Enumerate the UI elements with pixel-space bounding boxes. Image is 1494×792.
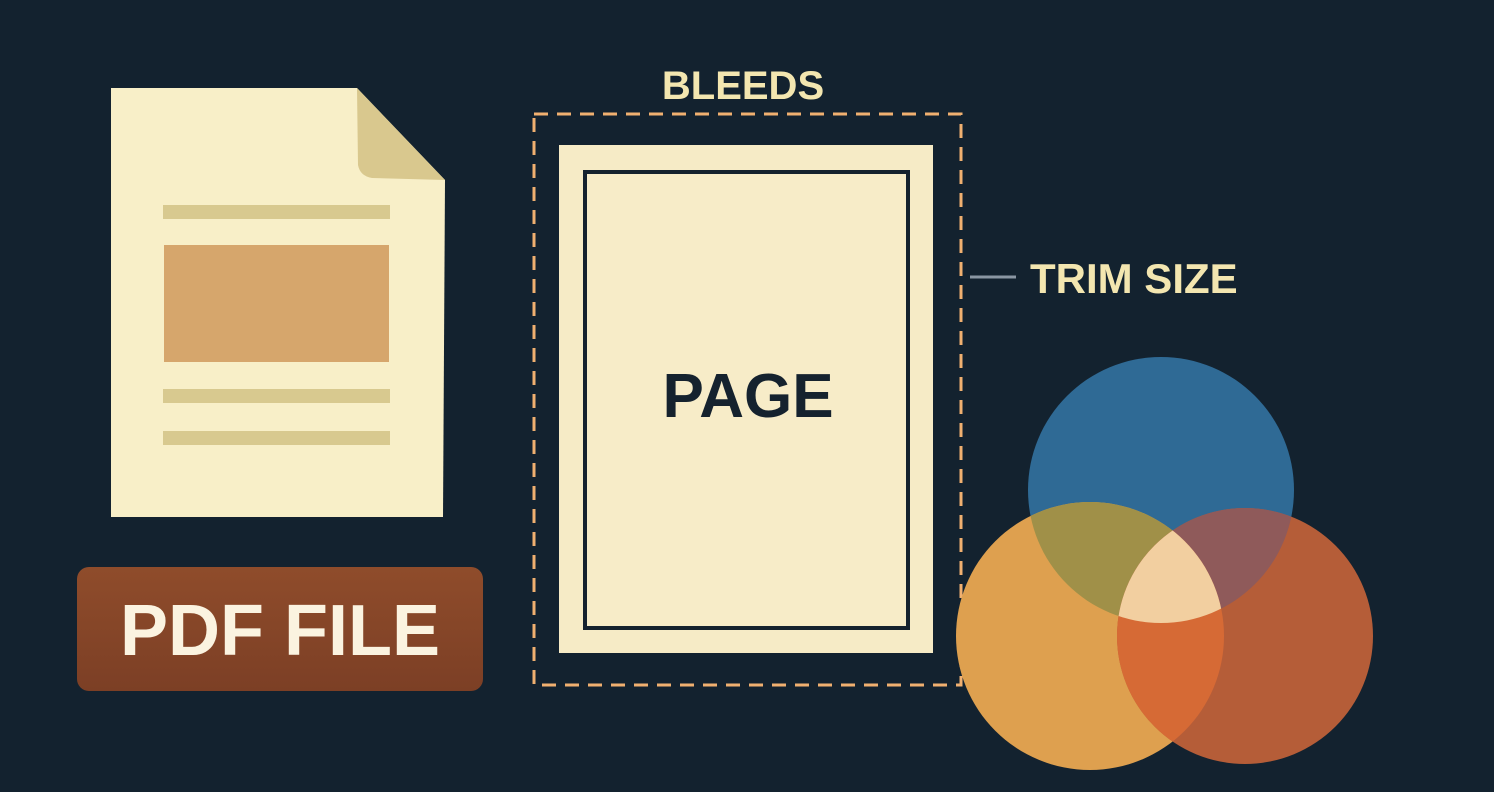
icon: pdf document [111, 88, 445, 517]
venn diagram [956, 357, 1373, 770]
page sheet: PAGE [662, 362, 834, 431]
page sheet [559, 145, 933, 653]
label: pdf file: PDF FILE [120, 591, 440, 671]
callout: trim size: TRIM SIZE [1030, 255, 1238, 302]
label: pdf file [77, 567, 483, 691]
bleed dashed outline [534, 114, 961, 685]
heading: bleeds: BLEEDS [662, 64, 824, 108]
